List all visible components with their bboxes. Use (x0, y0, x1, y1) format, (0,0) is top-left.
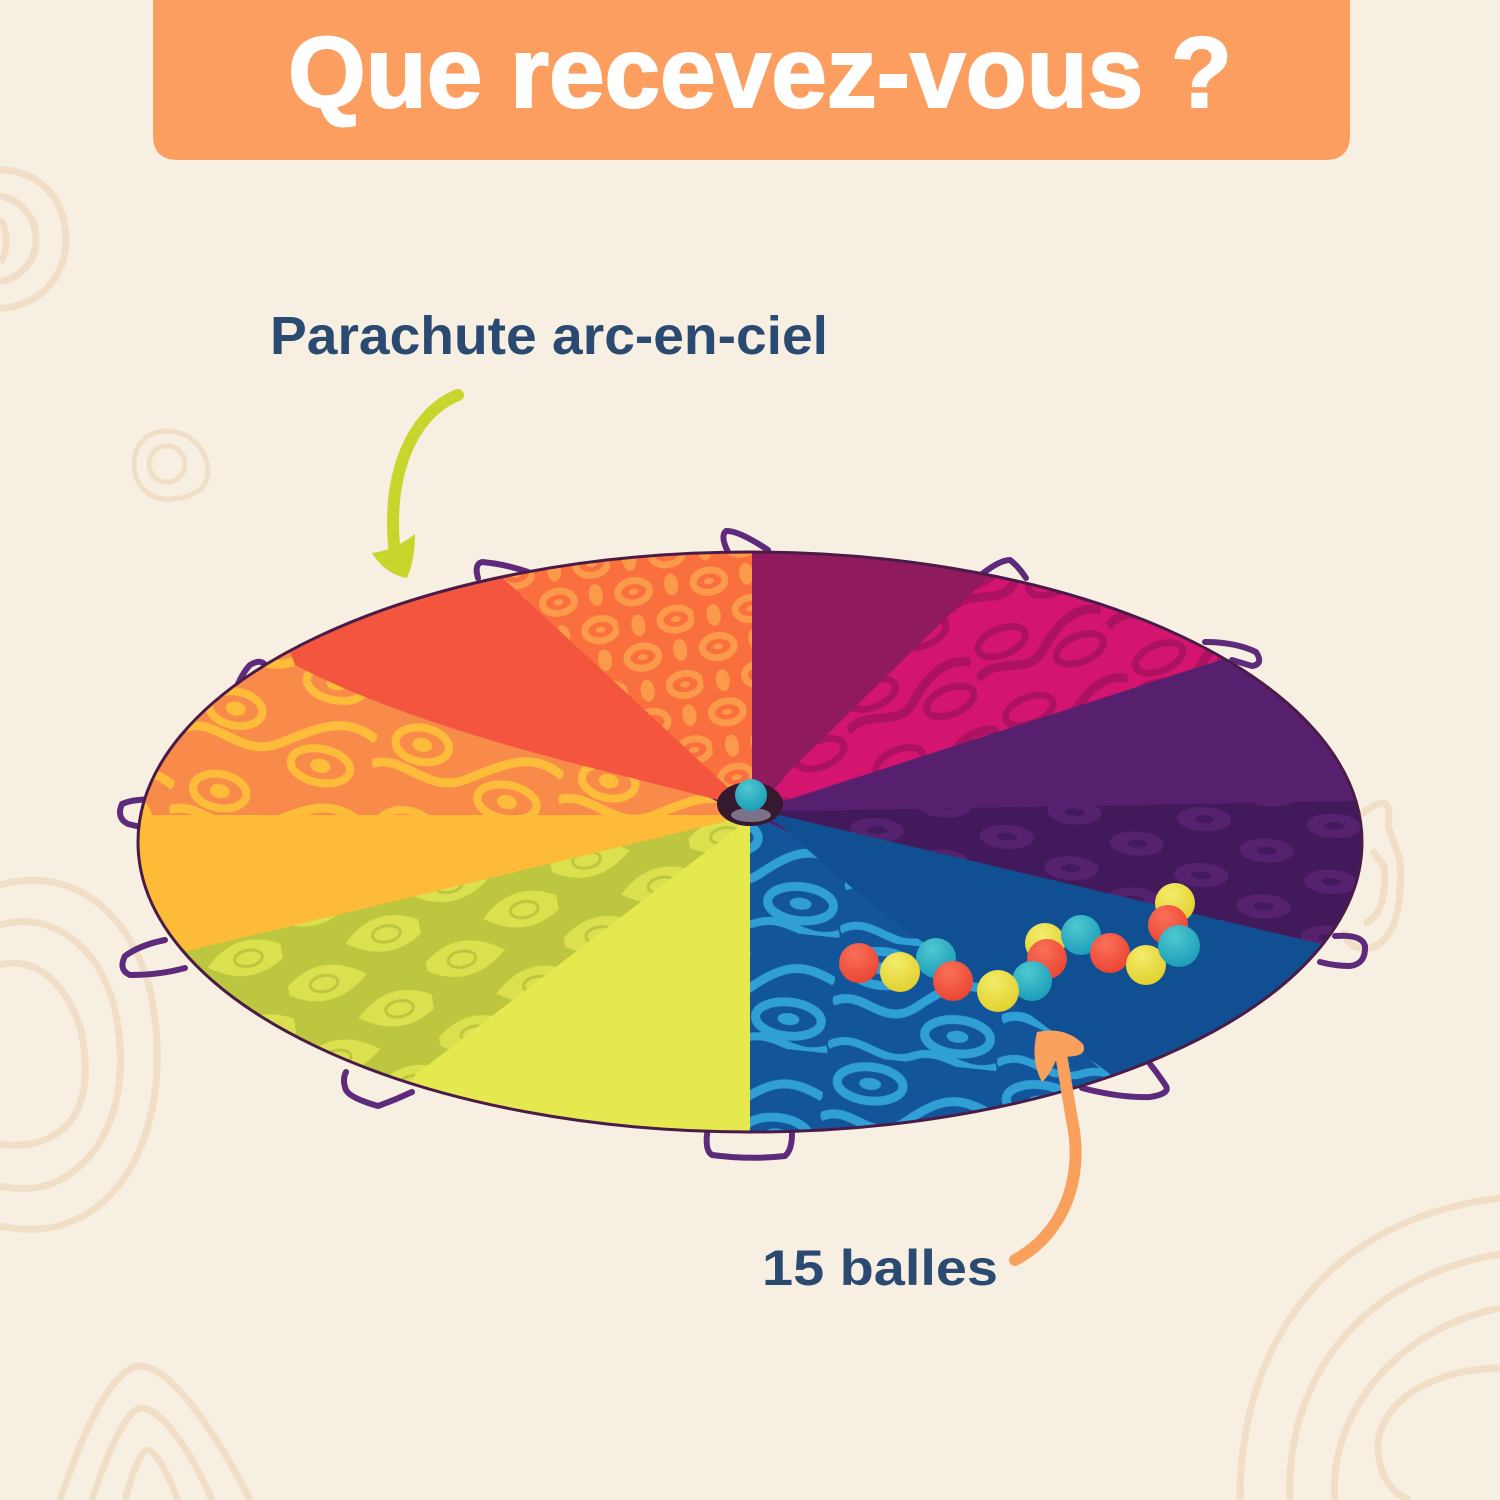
pink pattern overlay (781, 576, 1222, 802)
orange pattern overlay (142, 657, 718, 815)
hub with ball (717, 779, 783, 826)
blue pattern overlay (750, 826, 1111, 1130)
panel: olive patterned (185, 827, 706, 1075)
label: 15 balls: 15 balles (762, 1240, 998, 1296)
base layer under hub seams (710, 769, 792, 834)
arrow: orange pointing to balls (1015, 1030, 1084, 1260)
15 balls (839, 883, 1200, 1012)
panel: purple (781, 659, 1354, 812)
panels clipped to outline (140, 554, 1360, 1130)
olive pattern overlay (208, 820, 740, 1082)
panel: orange patterned (142, 652, 722, 815)
parachute handles (120, 531, 1365, 1158)
panel: amber (140, 815, 728, 952)
title: Que recevez-vous ? (288, 17, 1232, 129)
panel: navy blue (772, 815, 1321, 1075)
panel: pink patterned (774, 578, 1222, 799)
label: rainbow parachute: Parachute arc-en-ciel (270, 306, 828, 366)
outline (138, 552, 1362, 1132)
dark purple pattern overlay (850, 802, 1360, 944)
header banner (153, 0, 1350, 160)
panel: red (290, 578, 728, 800)
panel: deep magenta (752, 554, 988, 788)
panel: blue patterned (750, 822, 1105, 1130)
panel: red-orange patterned (504, 554, 752, 785)
panel: yellow (412, 826, 750, 1130)
arrow: green pointing to parachute (372, 395, 458, 578)
red-orange pattern overlay (504, 554, 752, 788)
panel: dark purple patterned (779, 801, 1360, 944)
parachute (136, 550, 1364, 1134)
